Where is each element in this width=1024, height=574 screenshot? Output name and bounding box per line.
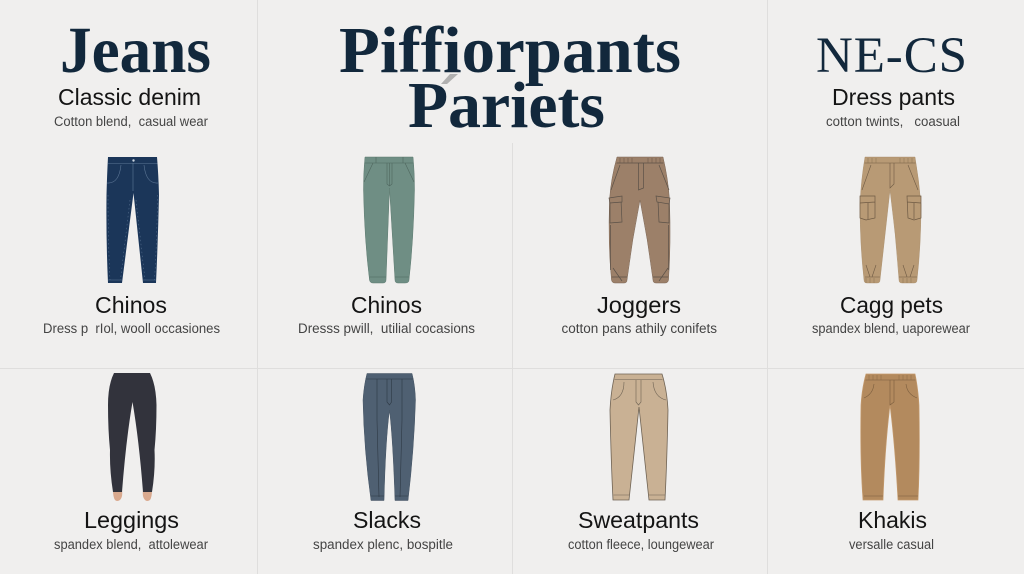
icon: camel khakis [861, 374, 919, 500]
panel: chinos 1 label [43, 292, 220, 336]
panel: khakis label [849, 507, 934, 552]
description: cotton fleece, loungewear [568, 537, 714, 552]
name: Khakis [858, 507, 927, 533]
panel: sweatpants label [568, 507, 714, 552]
description: spandex plenc, bospitle [313, 537, 453, 552]
grey slash mark [441, 74, 458, 84]
name: Chinos [351, 292, 422, 318]
description: spandex blend, attolewear [54, 537, 208, 552]
title line two: Pariets [408, 69, 605, 142]
name: Slacks [353, 507, 421, 533]
description: versalle casual [849, 537, 934, 552]
description: Dresss pwill, utilial cocasions [298, 321, 475, 336]
icon: green chinos [364, 157, 414, 283]
icon: tan cargo joggers [860, 157, 921, 283]
name: Chinos [95, 292, 167, 318]
icon: sand sweatpants [610, 374, 668, 500]
panel: chinos 2 label [298, 292, 475, 336]
description: spandex blend, uaporewear [812, 321, 970, 336]
description: cotton pans athily conifets [562, 321, 717, 336]
name: Sweatpants [578, 507, 699, 533]
panel: joggers label [562, 292, 717, 336]
panel: jeans header [54, 14, 211, 129]
name: Leggings [84, 507, 179, 533]
icon: black leggings [108, 373, 156, 501]
description: Dress p rIol, wooll occasiones [43, 321, 220, 336]
panel: NE-CS header [816, 28, 967, 129]
panel: cargo label [812, 292, 970, 336]
description: jeans: Cotton blend, casual wear [54, 114, 208, 129]
name: Cagg pets [840, 292, 943, 318]
subheading: Dress pants: Dress pants [832, 84, 955, 110]
icon: navy jeans [106, 157, 159, 283]
name: Joggers [597, 292, 681, 318]
subheading: Classic denim: Classic denim [58, 84, 201, 110]
title line one: Piffiorpants [339, 14, 681, 87]
description: dress pants: cotton twints, coasual [826, 114, 960, 129]
heading: NE-CS: NE-CS [816, 28, 967, 84]
panel: slacks label [313, 507, 453, 552]
icon: slate slacks [363, 374, 416, 500]
icon: brown cargo joggers [609, 157, 670, 283]
heading: Jeans: Jeans [60, 14, 211, 87]
panel: leggings label [54, 507, 208, 552]
main title [339, 14, 681, 142]
